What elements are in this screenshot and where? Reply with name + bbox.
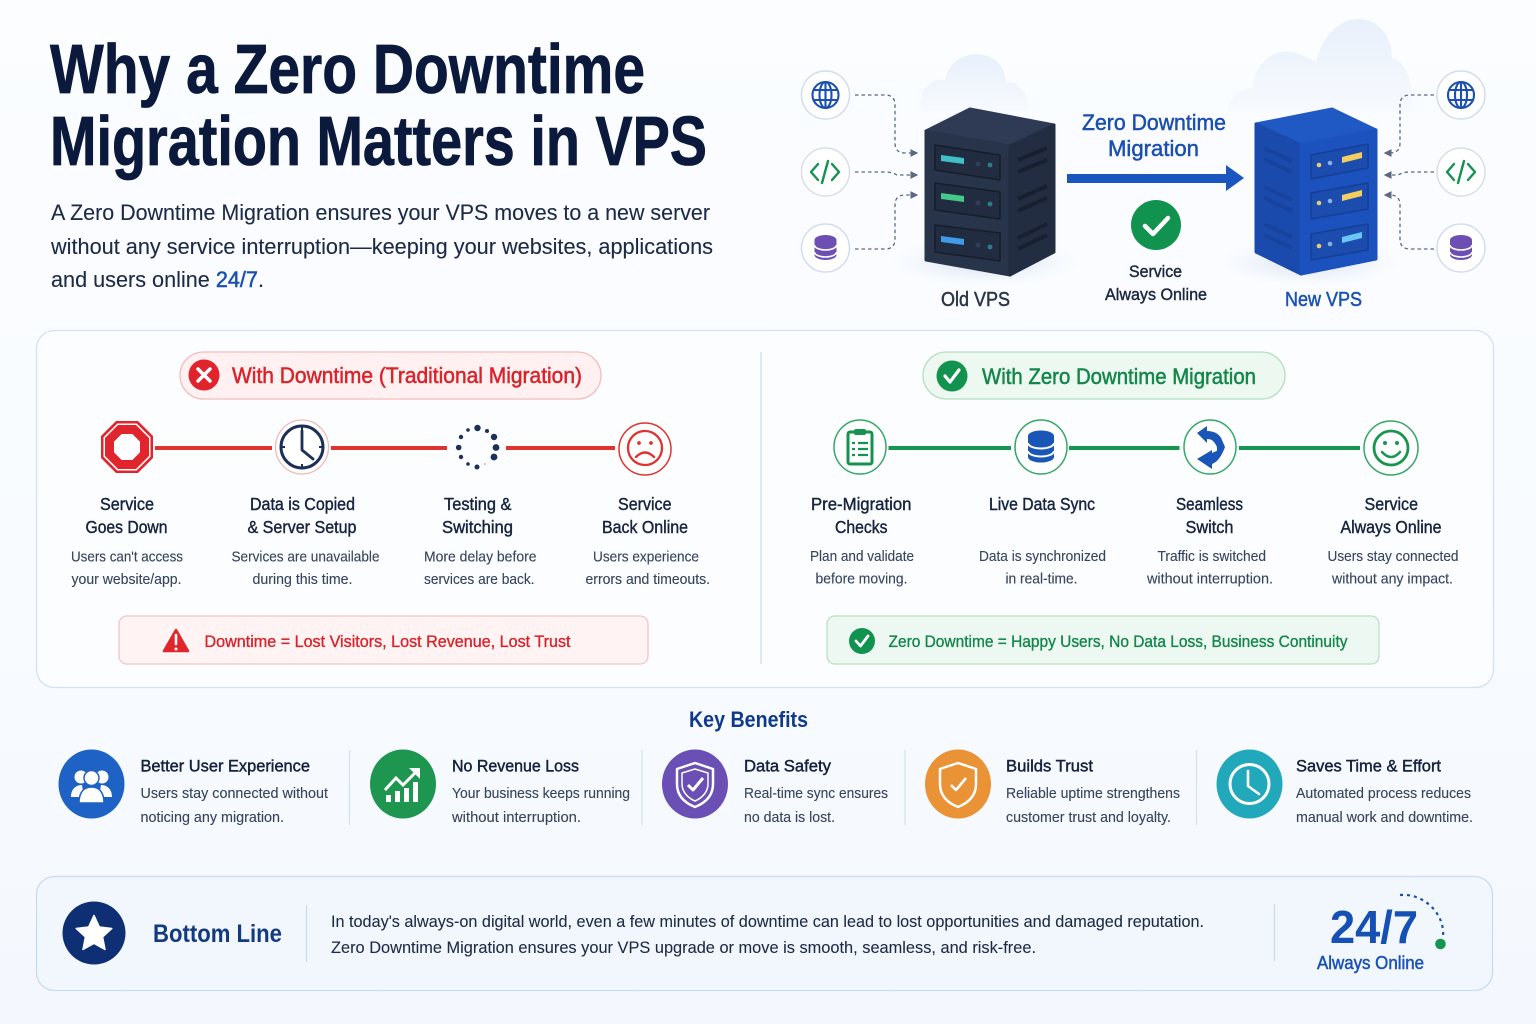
benefit: no revenue loss: without interruption.: [451, 810, 581, 826]
icon: sad face: [619, 423, 671, 475]
dashed connectors: [855, 95, 1434, 249]
step: data is copied: & Server Setup: [248, 517, 356, 537]
service always online label: [1105, 262, 1207, 304]
service always online label: Always Online: [1105, 285, 1207, 304]
benefit: better user experience: Users stay connected without: [140, 786, 328, 802]
step: pre-migration checks: Checks: [835, 517, 888, 537]
step: data is copied: Services are unavailable: [232, 550, 380, 566]
new server: [1256, 109, 1376, 274]
node icon: globe left: [802, 71, 850, 119]
benefit: better user experience: noticing any migration.: [140, 810, 284, 826]
step: live data sync: [979, 494, 1106, 588]
intro paragraph: without any service interruption—keeping your websites, applications: [50, 234, 713, 259]
title: [50, 30, 707, 180]
step: live data sync: Live Data Sync: [989, 494, 1095, 514]
step: service goes down: Users can't access: [71, 550, 183, 566]
migration diagram: [802, 19, 1485, 311]
step: service goes down: Service: [100, 494, 154, 514]
pill heading: zero downtime: [923, 352, 1285, 399]
step: service back online: errors and timeouts.: [586, 572, 710, 588]
node icon: code right: [1437, 148, 1485, 196]
step: seamless switch: without interruption.: [1146, 572, 1273, 588]
column: with downtime: [71, 352, 710, 664]
benefit: better user experience: [58, 750, 328, 826]
key benefits heading: Key Benefits: [689, 707, 808, 732]
step: service goes down: Goes Down: [86, 517, 168, 537]
pill heading: traditional: With Downtime (Traditional Migration): [232, 363, 582, 388]
benefit: better user experience: Better User Experience: [140, 756, 310, 776]
step: seamless switch: [1146, 494, 1273, 588]
step: live data sync: in real-time.: [1006, 572, 1078, 588]
benefit: saves time and effort: Automated process reduces: [1296, 786, 1471, 802]
benefits row: [58, 750, 1473, 826]
always online badge: 24/7: [1330, 901, 1418, 953]
callout: zero downtime benefit: Zero Downtime = Happy Users, No Data Loss, Business Continuity: [888, 632, 1348, 651]
panel: comparison: [36, 330, 1494, 688]
old server: [926, 109, 1054, 275]
callout: downtime cost: [119, 616, 648, 664]
intro paragraph: [50, 200, 713, 292]
benefit: builds trust: customer trust and loyalty.: [1006, 810, 1171, 826]
benefit: saves time and effort: Saves Time & Effort: [1296, 756, 1441, 776]
step: service goes down: [71, 494, 183, 588]
step: service always online: without any impact.: [1331, 572, 1453, 588]
icon: star badge: [62, 902, 126, 964]
step: pre-migration checks: Plan and validate: [810, 549, 914, 565]
icon: smile: [1364, 421, 1418, 475]
old vps label: Old VPS: [941, 289, 1010, 311]
column: zero downtime: [810, 352, 1458, 664]
title: Migration Matters in VPS: [50, 102, 707, 180]
cloud: new server: [1228, 19, 1412, 112]
benefit: builds trust: [925, 750, 1180, 826]
step: service back online: [586, 494, 710, 588]
benefit: builds trust: Reliable uptime strengthens: [1006, 786, 1180, 802]
benefit: saves time and effort: manual work and downtime.: [1296, 810, 1473, 826]
step: pre-migration checks: [810, 494, 914, 588]
step: service always online: Service: [1364, 494, 1418, 514]
benefit: no revenue loss: No Revenue Loss: [452, 756, 579, 776]
benefit: data safety: Data Safety: [744, 756, 831, 776]
step: testing and switching: More delay before: [424, 550, 536, 566]
icon: clock: [276, 420, 328, 474]
step: service back online: Service: [618, 494, 672, 514]
benefit: data safety: no data is lost.: [744, 810, 835, 826]
benefit: data safety: [662, 750, 888, 826]
step: testing and switching: Testing &: [444, 494, 512, 514]
icon: database: [1015, 420, 1067, 474]
migration heading: Zero Downtime: [1082, 110, 1226, 135]
pill heading: traditional: [180, 352, 601, 399]
step: service goes down: your website/app.: [72, 572, 182, 588]
cloud: old server: [921, 54, 1028, 112]
new vps label: New VPS: [1285, 289, 1362, 311]
node icon: code left: [802, 148, 850, 196]
step: service always online: [1328, 494, 1458, 588]
migration heading: [1082, 110, 1226, 161]
icon: stop sign: [101, 421, 153, 473]
bottom line text: Zero Downtime Migration ensures your VPS upgrade or move is smooth, seamless, and risk-free.: [331, 939, 1036, 957]
step: seamless switch: Switch: [1186, 517, 1234, 537]
step: testing and switching: Switching: [442, 517, 513, 537]
icon: clipboard: [834, 420, 886, 474]
title: Why a Zero Downtime: [50, 30, 645, 108]
node icon: database right: [1437, 224, 1485, 272]
benefit: no revenue loss: Your business keeps running: [452, 786, 630, 802]
node icon: globe right: [1437, 71, 1485, 119]
step: service always online: Users stay connected: [1328, 549, 1458, 565]
step: service always online: Always Online: [1340, 517, 1442, 537]
step: pre-migration checks: Pre-Migration: [811, 494, 912, 514]
timeline line: red: [155, 446, 615, 450]
intro paragraph: A Zero Downtime Migration ensures your VPS moves to a new server: [51, 200, 710, 225]
benefit: builds trust: Builds Trust: [1006, 756, 1093, 776]
migration arrow: [1067, 165, 1244, 191]
benefit: data safety: Real-time sync ensures: [744, 786, 888, 802]
step: data is copied: during this time.: [252, 572, 352, 588]
bottom line heading: Bottom Line: [153, 920, 282, 948]
step: testing and switching: [424, 494, 536, 588]
step: seamless switch: Traffic is switched: [1158, 549, 1266, 565]
timeline line: green: [888, 446, 1360, 450]
step: data is copied: [232, 494, 380, 588]
intro paragraph: and users online 24/7.: [51, 267, 264, 292]
always online badge: [1317, 895, 1446, 973]
step: data is copied: Data is Copied: [250, 494, 355, 514]
step: pre-migration checks: before moving.: [816, 572, 908, 588]
step: testing and switching: services are back.: [424, 572, 534, 588]
panel: bottom line: [36, 876, 1492, 990]
bottom line text: [331, 913, 1204, 957]
icon: switch arrows: [1184, 420, 1236, 474]
callout: zero downtime benefit: [827, 616, 1379, 664]
always online badge: Always Online: [1317, 953, 1424, 973]
benefit: no revenue loss: [370, 750, 630, 826]
node icon: database left: [802, 224, 850, 272]
step: service back online: Users experience: [593, 550, 699, 566]
bottom line text: In today's always-on digital world, even a few minutes of downtime can lead to lost opportunities and damaged reputation.: [331, 913, 1204, 931]
server shadows: [890, 238, 1400, 286]
icon: loading spinner: [456, 425, 499, 470]
callout: downtime cost: Downtime = Lost Visitors, Lost Revenue, Lost Trust: [204, 632, 571, 651]
migration heading: Migration: [1108, 136, 1199, 161]
benefit: saves time and effort: [1216, 750, 1473, 826]
step: live data sync: Data is synchronized: [979, 549, 1106, 565]
step: service back online: Back Online: [602, 517, 688, 537]
service always online label: Service: [1129, 262, 1182, 281]
step: seamless switch: Seamless: [1176, 494, 1243, 514]
pill heading: zero downtime: With Zero Downtime Migration: [982, 364, 1256, 389]
check badge: [1131, 200, 1181, 250]
